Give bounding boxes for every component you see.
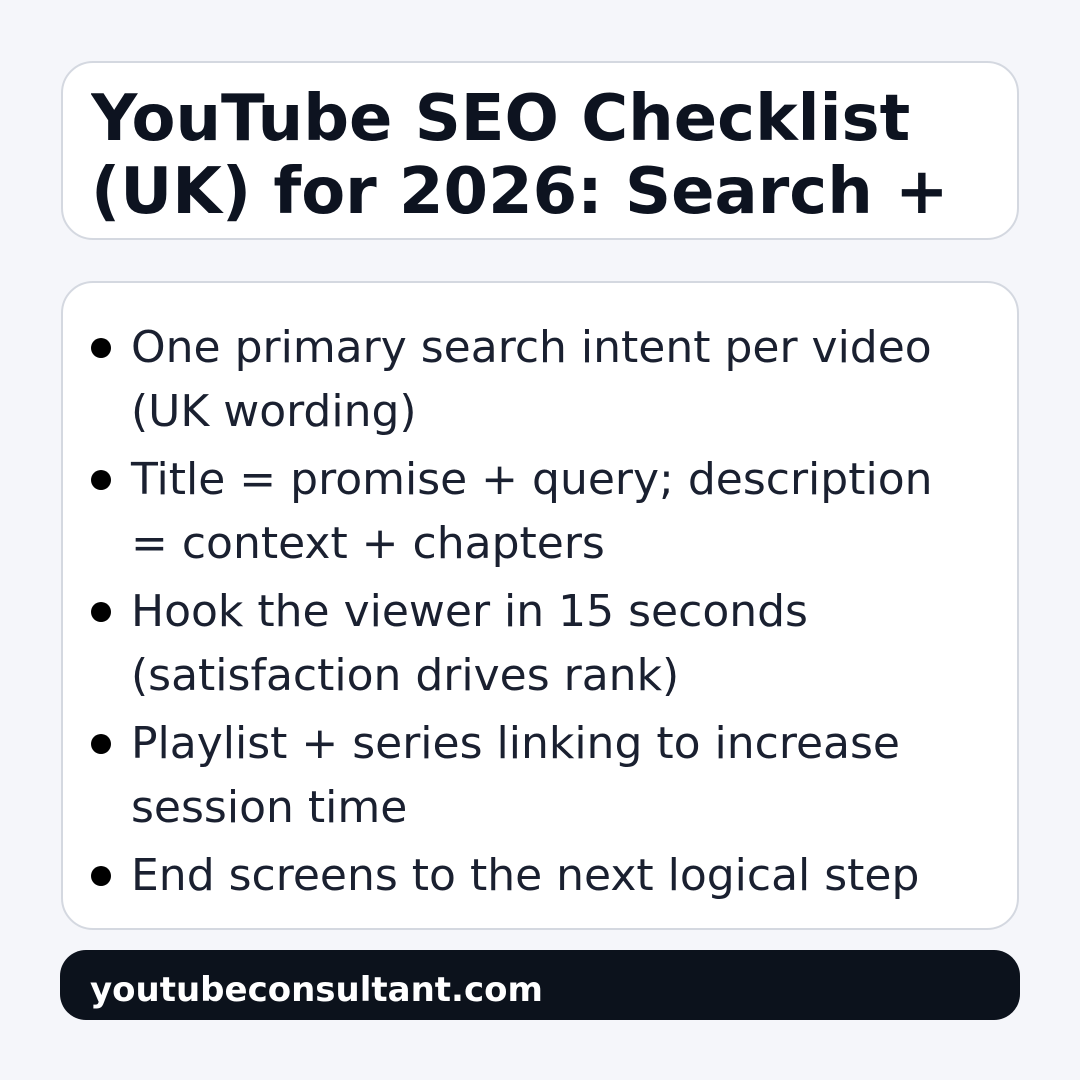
item 2: Title = promise + query; description = context + chapters [131,454,932,569]
item 1: One primary search intent per video (UK wording) [131,322,932,437]
item 3: Hook the viewer in 15 seconds (satisfaction drives rank) [131,586,808,701]
panel: title card [61,61,1019,240]
item 5: End screens to the next logical step [131,850,919,901]
bullet 5 [91,866,111,886]
footer bar: youtubeconsultant.com [90,970,543,1010]
panel: checklist [61,281,1019,930]
item 4: Playlist + series linking to increase session time [131,718,900,833]
footer bar [60,950,1020,1020]
bullet 1 [91,338,111,358]
bullet 3 [91,602,111,622]
bullet 4 [91,734,111,754]
bullet 2 [91,470,111,490]
